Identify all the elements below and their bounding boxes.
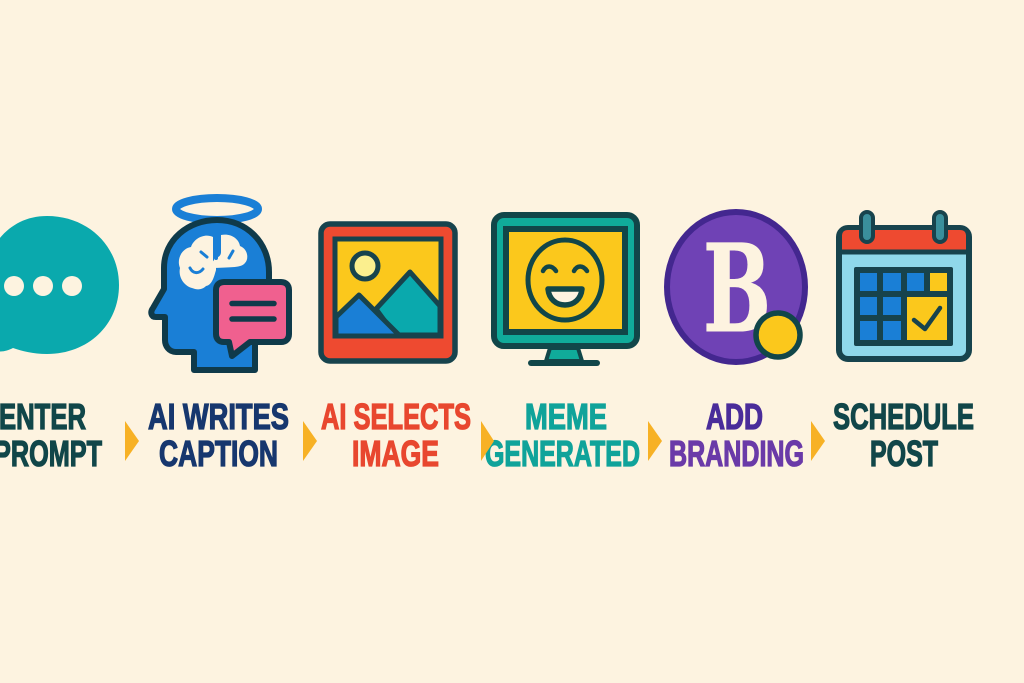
caption bubble — [216, 282, 289, 356]
label: add branding — [669, 396, 804, 474]
icon: AI head with brain and caption — [151, 198, 289, 370]
label: AI writes caption — [148, 396, 289, 474]
arrow 5 — [811, 421, 825, 461]
label: AI selects image: AI SELECTS — [321, 396, 471, 437]
label: AI selects image — [321, 396, 471, 474]
icon: monitor with smiling face — [494, 215, 637, 363]
label: schedule post — [833, 396, 974, 474]
label: schedule post: POST — [870, 433, 938, 474]
label: enter prompt: ENTER — [0, 396, 86, 437]
icon: chat bubble — [0, 216, 119, 354]
arrow 2 — [303, 421, 317, 461]
label: meme generated: GENERATED — [485, 433, 640, 474]
label: enter prompt — [0, 396, 102, 474]
label: meme generated: MEME — [525, 396, 607, 437]
brain — [179, 235, 247, 289]
arrow 4 — [648, 421, 662, 461]
icon: picture frame — [321, 224, 455, 361]
arrow 1 — [125, 421, 139, 461]
label: AI writes caption: CAPTION — [159, 433, 278, 474]
label: add branding: BRANDING — [669, 433, 804, 474]
label: AI writes caption: AI WRITES — [148, 396, 289, 437]
label: AI selects image: IMAGE — [352, 433, 439, 474]
label: meme generated — [485, 396, 640, 474]
icon: calendar — [839, 212, 969, 359]
label: add branding: ADD — [706, 396, 763, 437]
arrow 3 — [481, 421, 494, 461]
icon: brand badge: B — [703, 217, 771, 360]
